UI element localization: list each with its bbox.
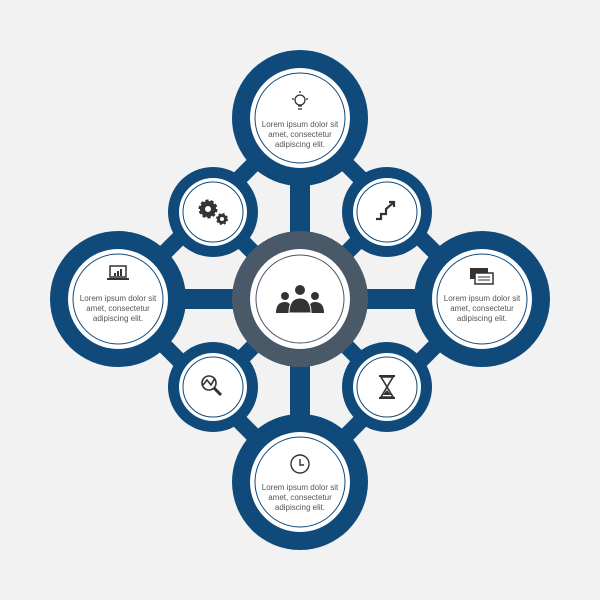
node: left: adipiscing elit.: [93, 314, 143, 323]
icon: magnifier: [202, 376, 221, 395]
node: left: amet, consectetur: [86, 304, 150, 313]
node: top: adipiscing elit.: [275, 140, 325, 149]
node: left: [50, 231, 186, 367]
icon: hourglass: [379, 375, 395, 399]
node: bottom: [232, 414, 368, 550]
node: top: Lorem ipsum dolor sit: [262, 120, 339, 129]
node: top: [232, 50, 368, 186]
icon: stairs arrow: [376, 202, 394, 219]
node: right: adipiscing elit.: [457, 314, 507, 323]
icon: bulb: [292, 91, 308, 109]
node: right: Lorem ipsum dolor sit: [444, 294, 521, 303]
node: left: Lorem ipsum dolor sit: [80, 294, 157, 303]
icon: gears: [200, 201, 227, 224]
node: analysis: [168, 342, 258, 432]
node: top: amet, consectetur: [268, 130, 332, 139]
node: gears: [168, 167, 258, 257]
icon: laptop chart: [107, 266, 129, 280]
node: growth: [342, 167, 432, 257]
node: right: [414, 231, 550, 367]
node: bottom: Lorem ipsum dolor sit: [262, 483, 339, 492]
node: bottom: amet, consectetur: [268, 493, 332, 502]
node: hourglass: [342, 342, 432, 432]
icon: team: [276, 285, 324, 313]
node: right: amet, consectetur: [450, 304, 514, 313]
connectors: [118, 118, 482, 482]
icon: clock: [291, 455, 309, 473]
node: center: [232, 231, 368, 367]
node: bottom: adipiscing elit.: [275, 503, 325, 512]
icon: cards: [470, 268, 493, 284]
